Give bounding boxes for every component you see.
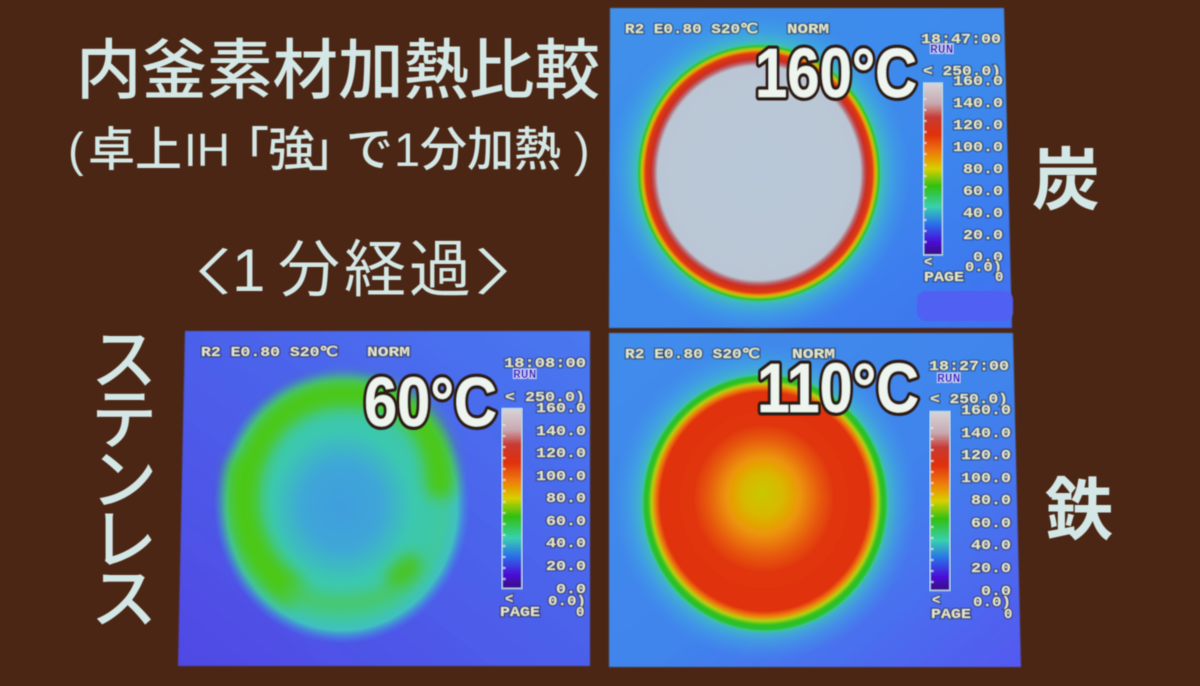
- camera readout: <: [505, 592, 513, 608]
- subtitle: 卓上: [88, 123, 182, 176]
- heat glow: [607, 13, 911, 333]
- camera readout: 120.0: [536, 446, 586, 462]
- camera readout: 140.0: [961, 426, 1011, 442]
- camera readout: 60.0: [971, 516, 1011, 532]
- camera readout: 140.0: [536, 424, 586, 440]
- camera readout: 160.0: [961, 403, 1011, 419]
- heat disc: [214, 368, 470, 644]
- camera readout: [201, 345, 586, 621]
- camera readout: 20.0: [963, 228, 1003, 244]
- camera readout: < 250.0): [923, 64, 1001, 80]
- camera readout: 20.0: [971, 561, 1011, 577]
- camera readout: 0.0: [556, 582, 586, 598]
- camera readout: 0.0): [548, 594, 586, 610]
- temperature callout: 160: 160°C: [755, 34, 917, 112]
- camera readout: NORM: [792, 347, 835, 363]
- subtitle: 」: [310, 123, 357, 176]
- label: stainless: レ: [91, 503, 157, 577]
- label: stainless: ン: [91, 443, 157, 517]
- camera readout: 0.0): [965, 260, 1002, 276]
- camera readout: < 250.0): [930, 392, 1008, 408]
- temperature callout: 110: 110°C: [757, 349, 919, 427]
- camera readout: PAGE: [500, 605, 540, 621]
- camera readout: 140.0: [953, 96, 1003, 112]
- camera readout: 60.0: [963, 184, 1003, 200]
- subtitle: (: [68, 123, 84, 176]
- elapsed time heading: 分: [278, 236, 340, 305]
- heat glow: [613, 345, 917, 661]
- camera readout: 120.0: [953, 118, 1003, 134]
- elapsed time heading: 〉: [474, 246, 554, 301]
- camera readout: <: [932, 593, 940, 609]
- camera readout: NORM: [367, 345, 410, 361]
- camera readout: 40.0: [546, 536, 586, 552]
- camera readout: 0.0): [973, 595, 1011, 611]
- camera readout: R2 E0.80 S20℃: [201, 345, 338, 361]
- camera readout: < 250.0): [505, 390, 585, 406]
- panel: iron thermal image: [609, 333, 1021, 667]
- camera readout: [625, 22, 1003, 286]
- label: stainless: テ: [91, 383, 157, 457]
- thermal disc: [637, 44, 881, 302]
- camera readout: 100.0: [961, 471, 1011, 487]
- panel: stainless thermal image: [178, 331, 590, 666]
- label: stainless: ス: [91, 562, 157, 636]
- camera readout: 100.0: [536, 469, 586, 485]
- subtitle: 強: [268, 123, 315, 176]
- camera readout: [625, 347, 1012, 623]
- subtitle: 「: [222, 123, 269, 176]
- subtitle: IH: [184, 124, 230, 176]
- camera readout: RUN: [513, 367, 536, 382]
- elapsed time heading: 経: [344, 236, 406, 305]
- camera readout: NORM: [787, 22, 829, 38]
- subtitle: で: [346, 123, 393, 176]
- green ring: [243, 393, 440, 604]
- subtitle: 分加熱: [420, 123, 561, 176]
- camera readout: 18:08:00: [504, 356, 586, 372]
- colour scale: [924, 83, 942, 255]
- camera readout: 100.0: [953, 140, 1003, 156]
- label: stainless: ス: [91, 323, 157, 397]
- bottom-right blue patch: [917, 291, 1013, 321]
- subtitle: 1: [394, 123, 420, 176]
- camera readout: 40.0: [971, 538, 1011, 554]
- camera readout: 80.0: [971, 493, 1011, 509]
- elapsed time heading: 〈: [152, 246, 232, 301]
- camera readout: R2 E0.80 S20℃: [625, 22, 758, 38]
- label: charcoal: 炭: [1032, 143, 1100, 219]
- camera readout: 80.0: [963, 162, 1003, 178]
- camera readout: PAGE: [924, 270, 964, 286]
- title: 内釜素材加熱比較: [76, 34, 600, 107]
- camera readout: 0: [995, 270, 1003, 286]
- camera readout: PAGE: [931, 607, 971, 623]
- camera readout: 0: [1004, 607, 1012, 623]
- elapsed time heading: 過: [409, 236, 471, 305]
- elapsed time heading: 1: [232, 237, 265, 304]
- camera readout: 60.0: [546, 514, 586, 530]
- thermal disc: [642, 374, 888, 632]
- colour scale: [502, 408, 522, 588]
- temperature callout: 60: 60°C: [364, 363, 497, 441]
- label: iron: 鉄: [1045, 473, 1113, 549]
- elapsed time heading: [152, 236, 554, 305]
- camera readout: 160.0: [536, 401, 586, 417]
- subtitle: ): [574, 123, 590, 176]
- panel: charcoal thermal image: [607, 8, 1013, 333]
- camera readout: 0.0: [981, 584, 1011, 600]
- camera readout: 40.0: [963, 206, 1003, 222]
- camera readout: RUN: [937, 371, 960, 386]
- camera readout: 18:47:00: [921, 32, 1001, 48]
- camera readout: R2 E0.80 S20℃: [625, 347, 760, 363]
- camera readout: 80.0: [546, 491, 586, 507]
- camera readout: 0.0: [973, 250, 1003, 266]
- colour scale: [930, 412, 950, 590]
- camera readout: <: [924, 255, 932, 271]
- camera readout: 20.0: [546, 559, 586, 575]
- camera readout: 0: [576, 605, 584, 621]
- camera readout: RUN: [930, 42, 953, 57]
- camera readout: 160.0: [953, 74, 1003, 90]
- camera readout: 18:27:00: [929, 359, 1009, 375]
- camera readout: 120.0: [961, 448, 1011, 464]
